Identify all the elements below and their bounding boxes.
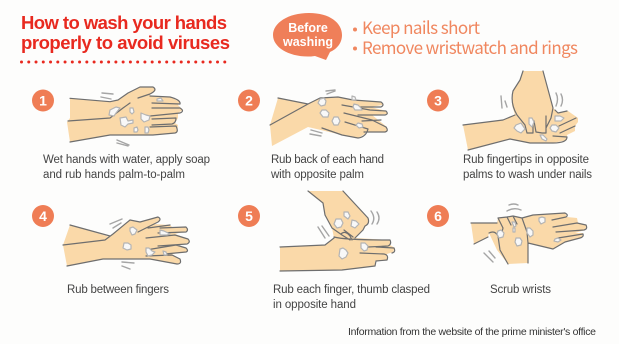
caption 2: Rub back of each hand — [271, 154, 384, 166]
caption 4: Rub between fingers — [67, 284, 169, 296]
step 3 — [427, 71, 592, 181]
source note: Information from the website of the prime minister's office — [348, 326, 596, 338]
number badge 3 — [427, 90, 449, 112]
dotted title underline — [22, 60, 232, 64]
illustration: palm to palm — [67, 87, 183, 146]
illustration: back of hand — [270, 90, 387, 146]
caption 2 — [270, 154, 384, 181]
number badge 1 — [32, 90, 54, 112]
before-washing tips: Keep nails short — [362, 14, 481, 39]
number badge 4 — [32, 205, 54, 227]
caption 3: palms to wash under nails — [463, 169, 592, 181]
step 2 — [238, 90, 387, 181]
title: properly to avoid viruses — [21, 32, 230, 53]
illustration: scrub wrists — [471, 204, 587, 264]
step 1 — [32, 87, 210, 181]
step 6 — [427, 204, 587, 296]
caption 3 — [463, 154, 592, 181]
illustration: clasped thumb — [280, 191, 395, 271]
speech bubble: before washing: washing — [282, 35, 333, 49]
number badge 2: 2 — [245, 92, 253, 108]
step 5 — [238, 191, 430, 311]
caption 3: Rub fingertips in opposite — [463, 154, 589, 166]
title: How to wash your hands — [21, 12, 227, 33]
caption 1 — [43, 154, 210, 181]
number badge 6 — [427, 205, 449, 227]
number badge 4: 4 — [39, 208, 47, 224]
number badge 5: 5 — [245, 208, 253, 224]
title — [21, 12, 230, 53]
caption 5 — [273, 284, 430, 311]
number badge 2 — [238, 90, 260, 112]
illustration: between fingers — [63, 217, 189, 269]
caption 1: Wet hands with water, apply soap — [43, 154, 210, 166]
caption 5: in opposite hand — [273, 299, 356, 311]
caption 5: Rub each finger, thumb clasped — [273, 284, 430, 296]
step 4 — [32, 205, 189, 296]
caption 2: with opposite palm — [270, 169, 364, 181]
speech bubble: before washing: Before — [288, 21, 328, 35]
caption 1: and rub hands palm-to-palm — [43, 169, 185, 181]
number badge 6: 6 — [434, 208, 442, 224]
caption 6: Scrub wrists — [490, 284, 551, 296]
before-washing tips — [353, 14, 578, 59]
before-washing tips: Remove wristwatch and rings — [362, 34, 578, 59]
speech bubble: before washing — [273, 13, 342, 60]
number badge 5 — [238, 205, 260, 227]
number badge 3: 3 — [434, 92, 442, 108]
number badge 1: 1 — [39, 92, 47, 108]
illustration: fingertips in palm — [463, 71, 578, 150]
